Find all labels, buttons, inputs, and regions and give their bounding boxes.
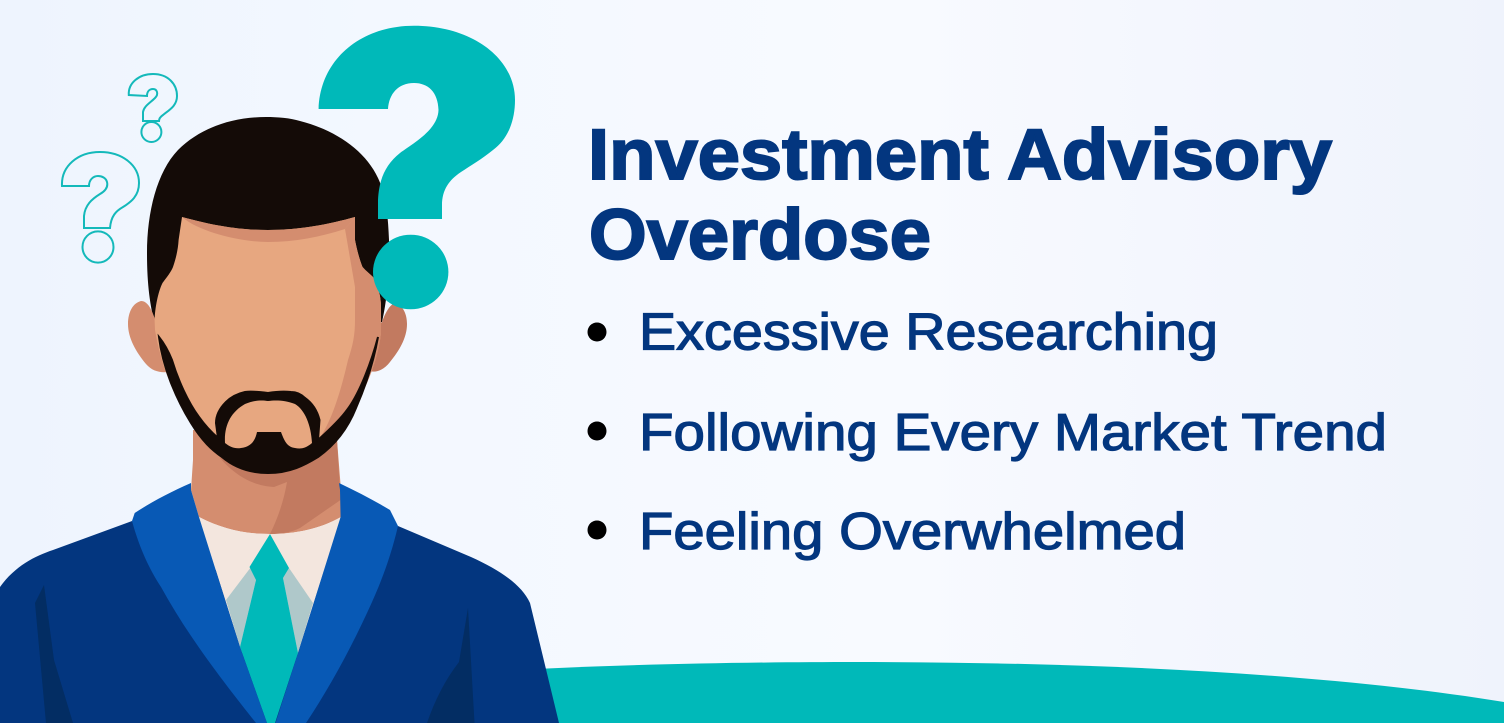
shirt xyxy=(199,517,341,723)
bullet list xyxy=(588,302,1387,560)
outlined question mark, small xyxy=(129,74,177,142)
suit jacket xyxy=(0,521,559,723)
bullet: feeling overwhelmed: Feeling Overwhelmed xyxy=(639,502,1186,560)
hair xyxy=(147,117,389,330)
teal curved footer band xyxy=(520,662,1504,723)
face shade right xyxy=(318,217,381,440)
tie xyxy=(240,534,298,723)
face xyxy=(155,217,381,470)
neck xyxy=(191,430,341,534)
suit fold left xyxy=(35,585,73,723)
bullet: following every market trend: Following Every Market Trend xyxy=(639,403,1387,461)
forehead shadow xyxy=(182,217,355,242)
beard and moustache xyxy=(159,337,378,473)
bullet: excessive researching: Excessive Researching xyxy=(639,302,1218,360)
left ear xyxy=(128,301,170,372)
neck shadow xyxy=(220,440,340,534)
right ear xyxy=(368,303,407,372)
large teal question mark xyxy=(319,26,515,309)
title: Overdose xyxy=(589,196,931,275)
collar shadow left xyxy=(226,567,256,647)
outlined question mark, large xyxy=(62,152,139,263)
title: Investment Advisory xyxy=(588,116,1333,195)
lapel right xyxy=(276,483,398,723)
character: businessman xyxy=(0,117,559,723)
suit fold right xyxy=(427,608,474,723)
lip and chin skin xyxy=(225,400,312,448)
lapel left xyxy=(132,483,267,723)
collar shadow right xyxy=(283,568,313,653)
title xyxy=(588,116,1333,275)
